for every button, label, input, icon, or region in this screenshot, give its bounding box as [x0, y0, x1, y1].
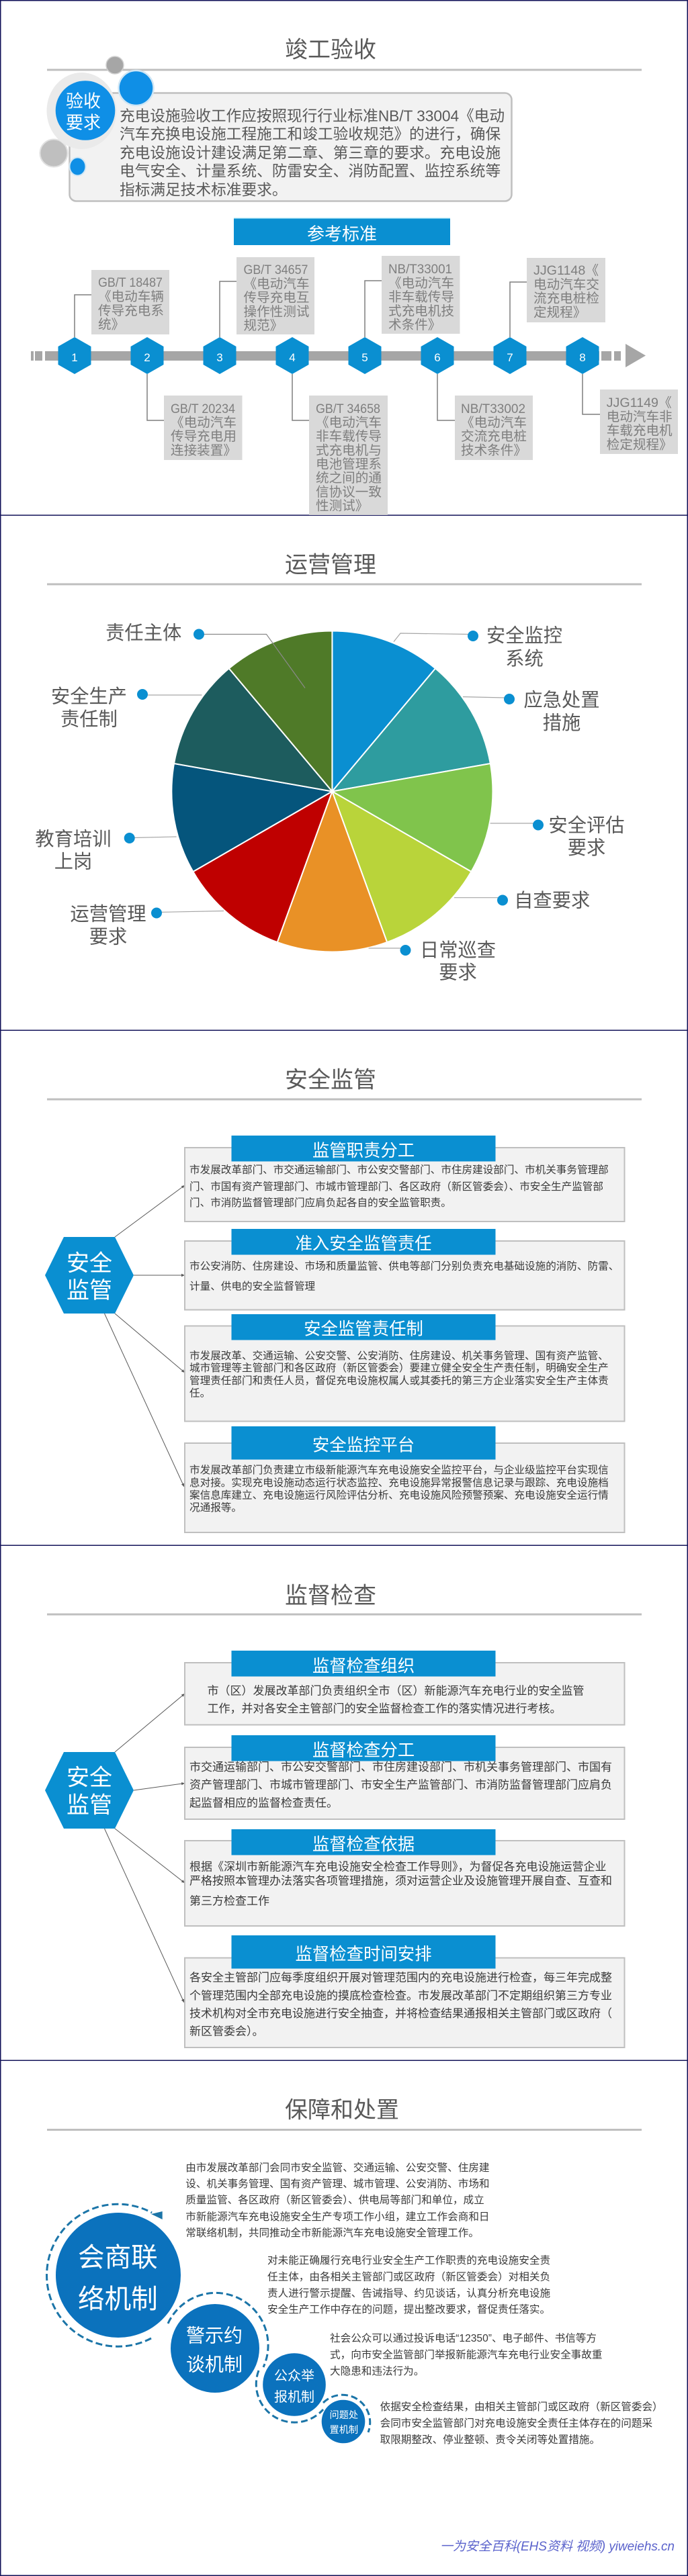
heading: safeguards and disposal: 保障和处置 — [285, 2098, 399, 2123]
pie label: operations management requirements: 要求 — [89, 925, 127, 947]
panel: inspection schedule — [185, 1935, 625, 2048]
pie label: safety production responsibility: 责任制 — [60, 708, 118, 729]
pie label: education and training: 上岗 — [54, 850, 92, 872]
text block: warning and interview: 安全生产工作中存在的问题，提出整改要求，督促责任落实。 — [267, 2303, 550, 2315]
standard box 4: 式充电机与 — [316, 443, 382, 458]
badge: acceptance requirements: 要求 — [66, 112, 101, 132]
standard box 1: 传导充电系 — [98, 304, 164, 318]
text block: consultation and liaison: 常联络机制，共同推动全市新能源汽车充电设施安全管理工作。 — [185, 2226, 479, 2239]
panel: supervision duties: 门、市消防监督管理部门应肩负起各自的安全监管职责。 — [189, 1196, 452, 1209]
text block: warning and interview — [267, 2254, 550, 2315]
section: operations management — [35, 553, 642, 983]
panel: access safety supervision responsibility: 市公安消防、住房建设、市场和质量监管、供电等部门分别负责充电基础设施的消防、防雷、 — [189, 1260, 619, 1272]
panel: inspection organisation: 工作，并对各安全主管部门的安全监督检查工作的落实情况进行考核。 — [207, 1702, 562, 1715]
circle: warning and interview mechanism: 警示约 — [186, 2325, 243, 2346]
standard box 2 — [164, 396, 242, 460]
standard box 6: 交流充电桩 — [461, 429, 527, 444]
pie label: self inspection requirements — [454, 889, 590, 911]
standard box 3: GB/T 34657 — [243, 263, 308, 277]
panel: safety monitoring platform: 况通报等。 — [189, 1502, 242, 1514]
pie label: responsible entity — [105, 622, 305, 688]
standard box 3: 操作性测试 — [243, 305, 309, 320]
section: safety supervision — [45, 1068, 642, 1532]
text block: warning and interview: 对未能正确履行充电行业安全生产工作职责的充电设施安全责 — [267, 2254, 550, 2266]
panel: safety supervision responsibility system: 城市管理等主管部门和各区政府（新区管委会）要建立健全安全生产责任制，明确安全生产 — [189, 1362, 609, 1374]
text block: consultation and liaison: 由市发展改革部门会同市安全监管、交通运输、公安交警、住房建 — [185, 2162, 490, 2174]
standard box 3: 《电动汽车 — [243, 277, 309, 291]
heading: completion acceptance: 竣工验收 — [285, 38, 376, 63]
circle: public reporting mechanism — [256, 2353, 326, 2422]
timeline arrow — [31, 344, 646, 367]
standard box 5: 式充电机技 — [388, 304, 454, 318]
text block: problem disposal: 会同市安全监管部门对充电设施安全责任主体存在的问题采 — [380, 2417, 652, 2429]
circle: public reporting mechanism: 报机制 — [274, 2389, 314, 2405]
panel: inspection division of labour: 市交通运输部门、市公安交警部门、市住房建设部门、市机关事务管理部门、市国有 — [189, 1761, 612, 1774]
standard box 4: 非车载传导 — [316, 429, 382, 444]
arrows from hub to panels — [105, 1694, 185, 2003]
panel: inspection basis: 根据《深圳市新能源汽车充电设施安全检查工作导则》，为督促各充电设施运营企业 — [189, 1861, 606, 1874]
circle: public reporting mechanism: 公众举 — [274, 2368, 314, 2383]
pie label: operations management requirements: 运营管理 — [70, 903, 146, 924]
pie label: operations management requirements — [70, 903, 224, 947]
panel: acceptance requirements: 汽车充换电设施工程施工和竣工验收规范》的进行，确保 — [120, 126, 501, 143]
panel: inspection division of labour — [185, 1735, 625, 1819]
badge: acceptance requirements — [47, 73, 117, 149]
panel: acceptance requirements: 充电设施验收工作应按照现行行业标准NB/T 33004《电动 — [120, 107, 505, 124]
standard box 5: 术条件》 — [388, 318, 441, 332]
panel: safety monitoring platform — [185, 1426, 625, 1532]
standard box 4 — [309, 396, 388, 515]
pie label: daily patrol requirements — [369, 939, 496, 983]
standard box 1: 统》 — [98, 318, 124, 332]
panel: access safety supervision responsibility: 准入安全监管责任 — [295, 1234, 432, 1253]
timeline nodes 1 to 8: 1 — [71, 351, 78, 364]
text block: public reporting: 社会公众可以通过投诉电话“12350”、电子邮件、书信等方 — [330, 2332, 597, 2344]
standard box 7: 定规程》 — [533, 305, 586, 320]
pie label: emergency response measures — [463, 689, 600, 733]
standard box 5: NB/T33001 — [388, 262, 452, 277]
panel: supervision duties — [185, 1136, 625, 1222]
standard box 6: 《电动汽车 — [461, 416, 527, 430]
standard box 1: 《电动车辆 — [98, 289, 164, 304]
pie label: safety assessment requirements: 安全评估 — [548, 814, 625, 835]
panel: safety monitoring platform: 安全监控平台 — [312, 1436, 415, 1455]
pie label: safety monitoring system: 安全监控 — [486, 625, 562, 646]
panel: inspection division of labour: 监督检查分工 — [312, 1741, 415, 1760]
timeline nodes 1 to 8: 8 — [579, 351, 586, 364]
circle: consultation and liaison mechanism: 会商联 — [78, 2243, 158, 2272]
pie label: safety monitoring system: 系统 — [505, 647, 544, 669]
standard box 5: 非车载传导 — [388, 290, 454, 305]
text block: consultation and liaison: 质量监管、各区政府（新区管委会）、供电局等部门和单位，成立 — [185, 2194, 484, 2206]
standard box 6 — [455, 396, 533, 460]
pie label: emergency response measures: 措施 — [543, 712, 580, 733]
standard box 8: JJG1149《 — [607, 396, 672, 410]
badge: acceptance requirements: 验收 — [66, 91, 101, 111]
panel: safety supervision responsibility system: 安全监管责任制 — [304, 1320, 423, 1338]
panel: inspection organisation: 市（区）发展改革部门负责组织全市（区）新能源汽车充电行业的安全监管 — [207, 1684, 585, 1697]
standard box 4: 性测试》 — [316, 498, 368, 513]
standard box 4: 统之间的通 — [316, 471, 382, 486]
panel: inspection schedule: 新区管委会）。 — [189, 2025, 263, 2037]
standard box 4: 《电动汽车 — [316, 416, 382, 430]
timeline nodes 1 to 8: 6 — [434, 351, 441, 364]
standard box 2: GB/T 20234 — [171, 402, 235, 416]
standard box 8: 电动汽车非 — [607, 410, 673, 424]
standard box 6: NB/T33002 — [461, 402, 525, 416]
hexagon: safety supervision hub — [45, 1752, 134, 1829]
pie label: education and training: 教育培训 — [35, 828, 112, 849]
standard box 7: 流充电桩检 — [533, 291, 599, 306]
standard box 4: GB/T 34658 — [316, 402, 380, 416]
standard box 6: 技术条件》 — [461, 443, 527, 458]
circle: problem disposal mechanism — [322, 2395, 370, 2443]
standard box 7: JJG1148《 — [533, 263, 599, 278]
hexagon: safety supervision hub: 安全 — [67, 1765, 112, 1791]
panel: safety monitoring platform: 案信息库建立、充电设施运行风险评估分析、充电设施风险预警预案、充电设施安全运行情 — [189, 1489, 609, 1501]
panel: acceptance requirements — [70, 93, 512, 201]
standard box 8 — [600, 389, 678, 454]
pie label: safety production responsibility: 安全生产 — [51, 685, 127, 706]
section: supervision and inspection — [45, 1583, 642, 2048]
hexagon: safety supervision hub: 安全 — [67, 1251, 112, 1277]
panel: safety supervision responsibility system: 管理责任部门和责任人员，督促充电设施权属人或其委托的第三方企业落实安全生产主体责 — [189, 1375, 609, 1387]
text block: public reporting: 大隐患和违法行为。 — [330, 2365, 424, 2377]
text block: problem disposal: 依据安全检查结果，由相关主管部门或区政府（新区管委会） — [380, 2401, 663, 2413]
section: completion acceptance — [31, 38, 678, 515]
pie label: responsible entity: 责任主体 — [105, 622, 181, 643]
standard box 1: GB/T 18487 — [98, 275, 163, 290]
standard box 2: 《电动汽车 — [171, 416, 236, 430]
circle: problem disposal mechanism: 问题处 — [329, 2410, 358, 2421]
circle: consultation and liaison mechanism — [47, 2204, 181, 2346]
panel: inspection basis: 监督检查依据 — [312, 1835, 415, 1854]
pie label: safety production responsibility — [51, 685, 202, 729]
footer: source credit: 一为安全百科(EHS资料 视频) yiweiehs.cn — [440, 2539, 675, 2554]
heading: supervision and inspection: 监督检查 — [285, 1583, 376, 1609]
banner: reference standards — [234, 218, 450, 245]
standard box 3: 传导充电互 — [243, 291, 309, 306]
arrows from hub to panels — [105, 1185, 185, 1487]
standard box 2: 连接装置》 — [171, 443, 236, 458]
pie label: daily patrol requirements: 日常巡查 — [420, 939, 496, 960]
hexagon: safety supervision hub: 监管 — [67, 1793, 112, 1819]
pie chart: nine equal segments — [171, 631, 492, 952]
panel: safety supervision responsibility system — [185, 1314, 625, 1421]
panel: acceptance requirements: 充电设施设计建设满足第二章、第三章的要求。充电设施 — [120, 144, 501, 161]
circle: warning and interview mechanism — [168, 2293, 268, 2393]
standard box 7 — [527, 258, 605, 322]
pie label: emergency response measures: 应急处置 — [523, 689, 600, 710]
circle: consultation and liaison mechanism: 络机制 — [78, 2285, 158, 2314]
hexagon: safety supervision hub — [45, 1237, 134, 1314]
text block: consultation and liaison: 设、机关事务管理、国有资产管理、城市管理、公安消防、市场和 — [185, 2178, 490, 2190]
timeline nodes 1 to 8 — [58, 337, 599, 374]
panel: safety monitoring platform: 市发展改革部门负责建立市级新能源汽车充电设施安全监控平台，与企业级监控平台实现信 — [189, 1464, 609, 1476]
standard box 4: 信协议一致 — [316, 485, 382, 500]
panel: inspection schedule: 技术机构对全市充电设施进行安全抽查，并将检查结果通报相关主管部门或区政府（ — [189, 2007, 612, 2020]
panel: access safety supervision responsibility: 计量、供电的安全监督管理 — [189, 1280, 316, 1292]
text block: consultation and liaison — [185, 2162, 490, 2239]
panel: access safety supervision responsibility — [185, 1229, 625, 1309]
panel: supervision duties: 监管职责分工 — [312, 1142, 415, 1160]
panel: safety monitoring platform: 息对接。实现充电设施动态运行状态监控、充电设施异常报警信息记录与跟踪、充电设施档 — [189, 1477, 609, 1489]
panel: inspection organisation: 监督检查组织 — [312, 1657, 415, 1675]
panel: safety supervision responsibility system: 市发展改革、交通运输、公安交警、公安消防、住房建设、机关事务管理、国有资产监管、 — [189, 1350, 609, 1362]
panel: inspection basis: 第三方检查工作 — [189, 1895, 269, 1908]
pie label: self inspection requirements: 自查要求 — [514, 889, 590, 911]
pie label: safety assessment requirements: 要求 — [568, 837, 605, 858]
text block: public reporting: 式，向市安全监管部门举报新能源汽车充电行业安全事故重 — [330, 2348, 602, 2360]
heading: operations management: 运营管理 — [285, 553, 376, 578]
panel: acceptance requirements: 指标满足技术标准要求。 — [120, 181, 288, 198]
standard box 7: 电动汽车交 — [533, 277, 599, 292]
standard box 8: 检定规程》 — [607, 437, 673, 452]
timeline nodes 1 to 8: 5 — [361, 351, 368, 364]
heading: safety supervision: 安全监管 — [285, 1068, 376, 1093]
panel: inspection schedule: 各安全主管部门应每季度组织开展对管理范围内的充电设施进行检查，每三年完成整 — [189, 1972, 612, 1984]
panel: inspection organisation — [185, 1651, 625, 1724]
icon: decorative bubble cluster — [40, 56, 153, 176]
timeline nodes 1 to 8: 2 — [144, 351, 150, 364]
standard box 5: 《电动汽车 — [388, 276, 454, 291]
pie label: safety monitoring system — [394, 625, 562, 669]
panel: inspection basis — [185, 1829, 625, 1926]
text block: public reporting — [330, 2332, 602, 2377]
timeline nodes 1 to 8: 7 — [507, 351, 513, 364]
panel: supervision duties: 门、市国有资产管理部门、市城市管理部门、各区政府（新区管委会）、市安全生产监管部 — [189, 1181, 603, 1193]
panel: safety supervision responsibility system: 任。 — [189, 1387, 210, 1399]
standard box 1 — [91, 270, 169, 334]
panel: inspection division of labour: 资产管理部门、市城市管理部门、市安全生产监管部门、市消防监督管理部门应肩负 — [189, 1778, 612, 1791]
text block: problem disposal: 取限期整改、停业整顿、责令关闭等处置措施。 — [380, 2434, 600, 2446]
standard box 8: 车载充电机 — [607, 424, 673, 439]
pie label: safety assessment requirements — [490, 814, 625, 858]
panel: supervision duties: 市发展改革部门、市交通运输部门、市公安交警部门、市住房建设部门、市机关事务管理部 — [189, 1164, 609, 1176]
panel: acceptance requirements: 电气安全、计量系统、防雷安全、消防配置、监控系统等 — [120, 162, 501, 179]
circle: problem disposal mechanism: 置机制 — [329, 2425, 358, 2436]
hexagon: safety supervision hub: 监管 — [67, 1278, 112, 1303]
text block: warning and interview: 任主体，由各相关主管部门或区政府（新区管委会）对相关负 — [267, 2271, 550, 2283]
panel: inspection schedule: 监督检查时间安排 — [295, 1945, 432, 1964]
circle: warning and interview mechanism: 谈机制 — [186, 2354, 243, 2375]
standard box 3: 规范》 — [243, 318, 283, 333]
standard box 5 — [382, 256, 460, 334]
text block: problem disposal — [380, 2401, 663, 2446]
text block: warning and interview: 责人进行警示提醒、告诫指导、约见谈话，认真分析充电设施 — [267, 2287, 550, 2299]
text block: consultation and liaison: 市新能源汽车充电设施安全生产专项工作小组，建立工作会商和日 — [185, 2211, 490, 2223]
timeline nodes 1 to 8: 4 — [289, 351, 296, 364]
pie label: daily patrol requirements: 要求 — [439, 962, 477, 983]
standard box 3 — [236, 257, 314, 334]
panel: inspection basis: 严格按照本管理办法落实各项管理措施，须对运营企业及设施管理开展自查、互查和 — [189, 1874, 612, 1887]
pie label: education and training — [35, 828, 177, 872]
section: safeguards and disposal — [47, 2098, 675, 2554]
panel: inspection schedule: 个管理范围内全部充电设施的摸底检查检查。市发展改革部门不定期组织第三方专业 — [189, 1989, 612, 2002]
standard box 4: 电池管理系 — [316, 457, 382, 472]
timeline nodes 1 to 8: 3 — [216, 351, 223, 364]
banner: reference standards: 参考标准 — [307, 224, 377, 244]
standard box 2: 传导充电用 — [171, 429, 236, 444]
panel: inspection division of labour: 起监督相应的监督检查责任。 — [189, 1796, 338, 1809]
